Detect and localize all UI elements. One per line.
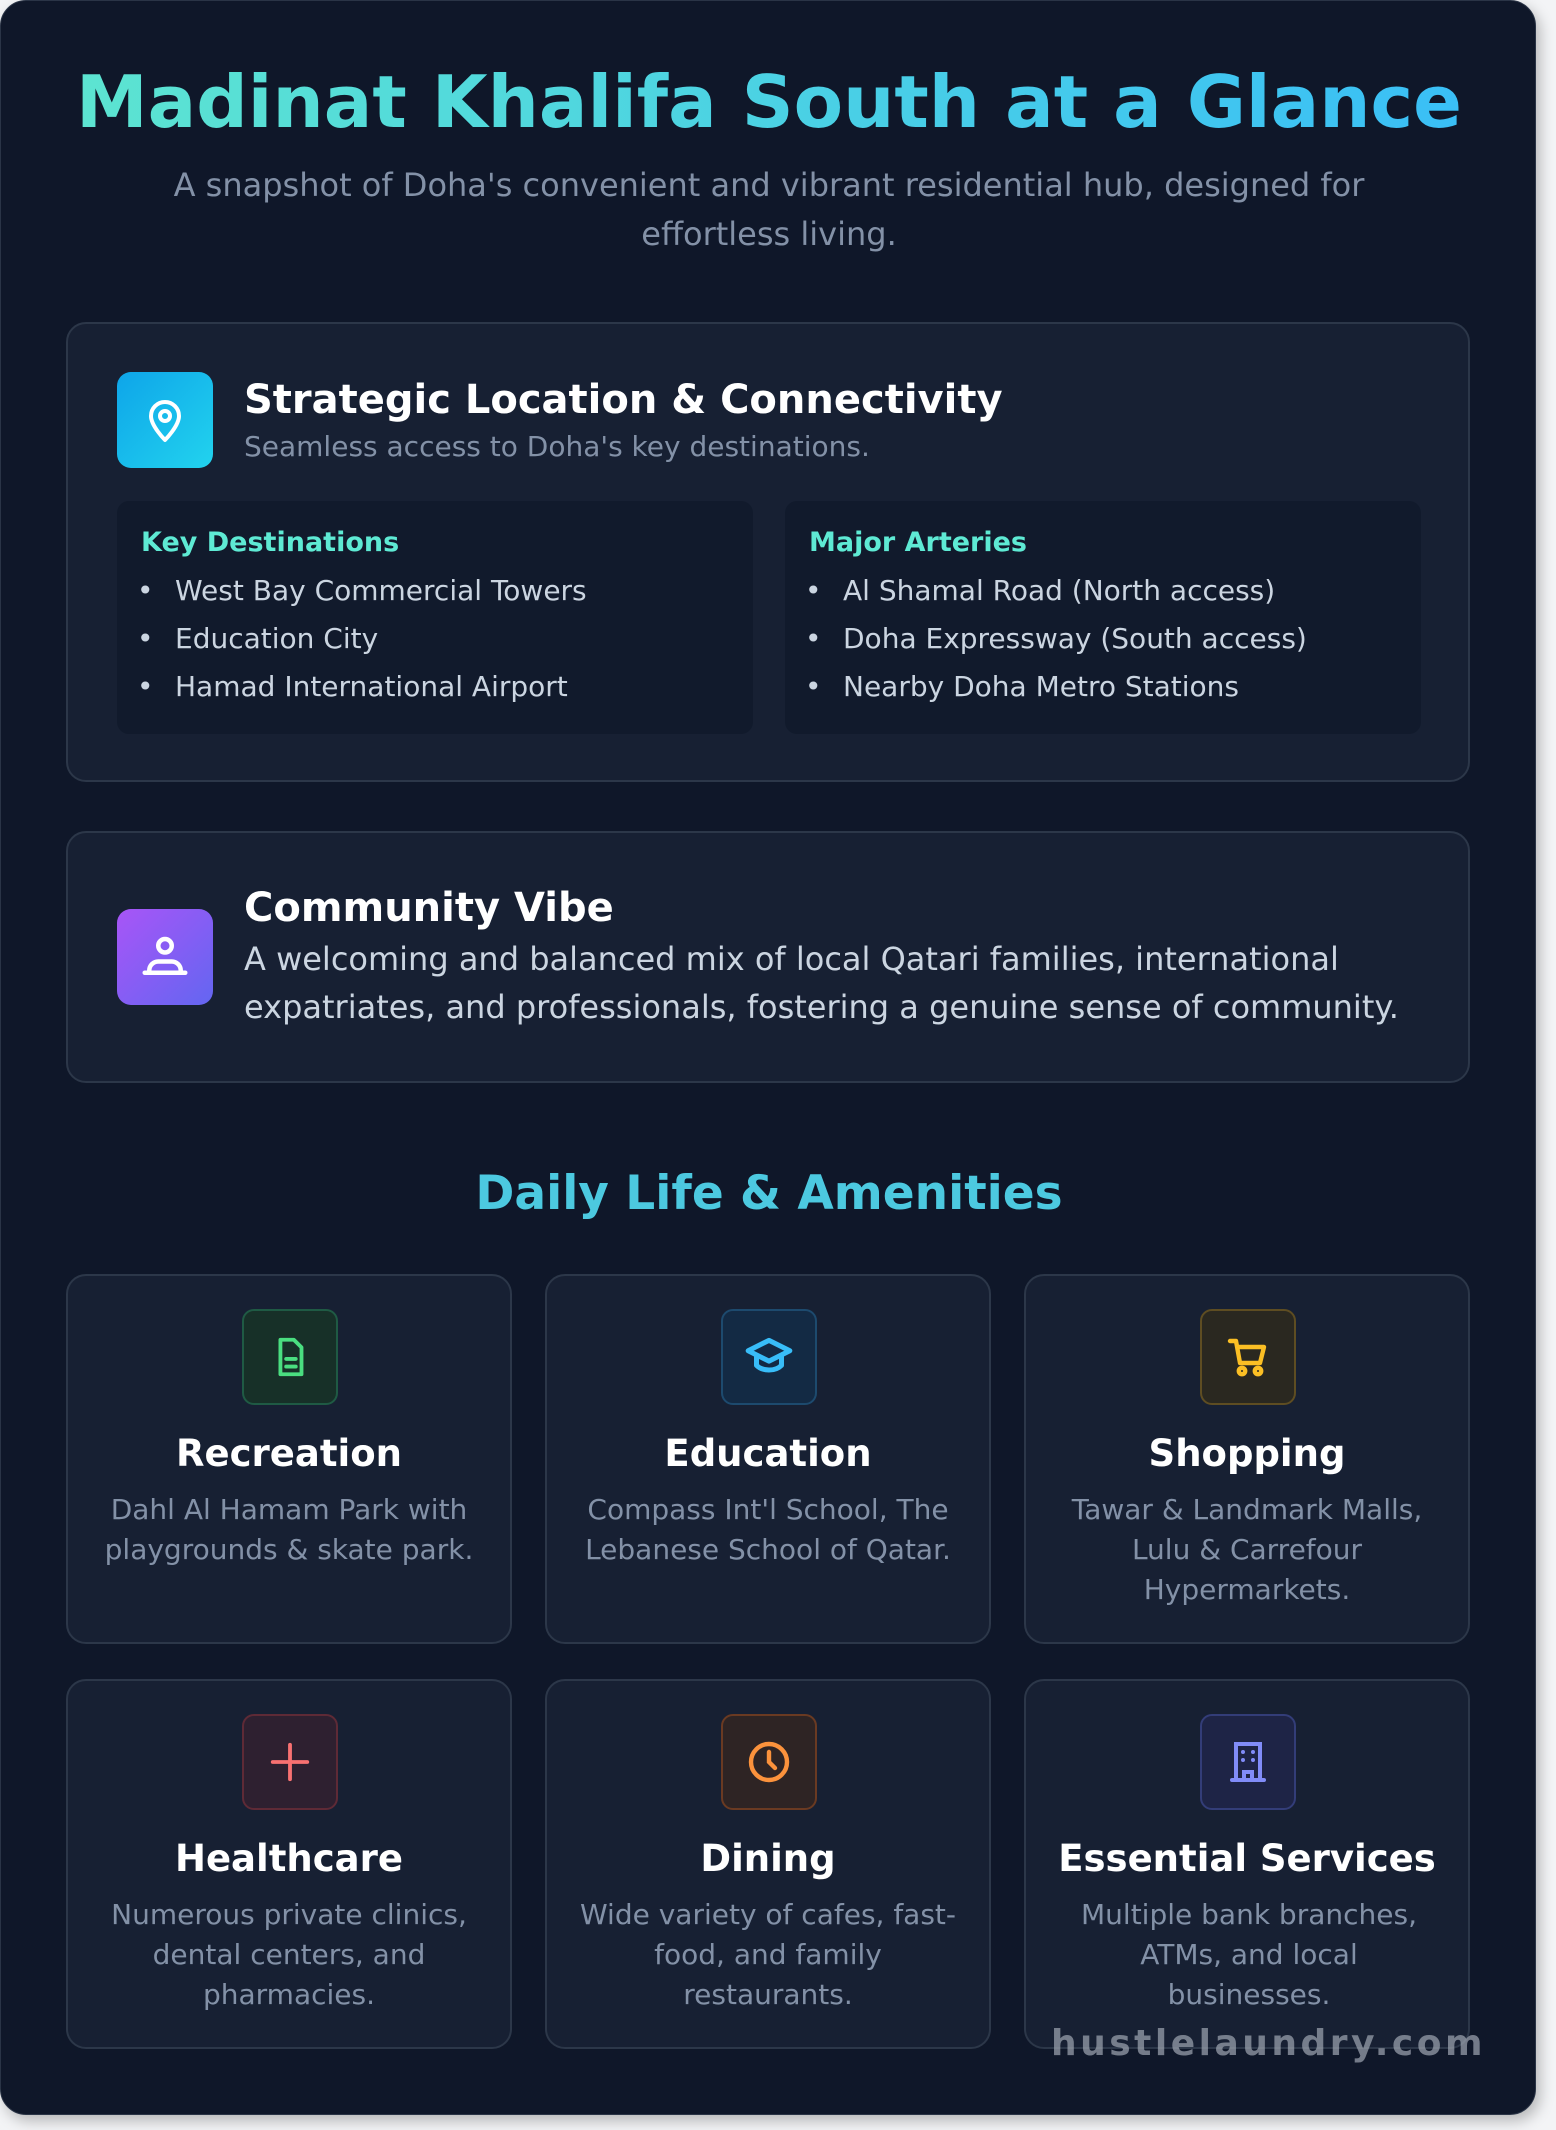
box: major arteries: Doha Expressway (South access) [843,622,1307,655]
card: education: Education [664,1432,872,1475]
icon: document [242,1309,338,1405]
icon: clock [721,1714,817,1810]
section heading: Daily Life & Amenities [475,1166,1063,1221]
card: essential services [1024,1679,1470,2049]
card: recreation [66,1274,512,1644]
box: major arteries: Al Shamal Road (North access) [843,574,1275,607]
icon: graduation cap [721,1309,817,1405]
card: shopping: Tawar & Landmark Malls, Lulu & Carrefour Hypermarkets. [1072,1493,1422,1606]
panel: community [66,831,1470,1083]
icon: location pin [117,372,213,468]
card: shopping: Shopping [1149,1432,1345,1475]
card: education [545,1274,991,1644]
icon: cart [1200,1309,1296,1405]
box: major arteries [785,501,1421,734]
card: healthcare: Healthcare [175,1837,403,1880]
card: dining: Dining [700,1837,836,1880]
box: key destinations [117,501,753,734]
card: shopping [1024,1274,1470,1644]
box: key destinations: Education City [175,622,378,655]
box: key destinations: West Bay Commercial Towers [175,574,587,607]
card: essential services: Essential Services [1058,1837,1436,1880]
title: Madinat Khalifa South at a Glance [76,60,1462,144]
subheading: Seamless access to Doha's key destinations. [244,430,870,463]
heading: Strategic Location & Connectivity [244,377,1003,423]
card: dining: Wide variety of cafes, fast-food, and family restaurants. [580,1898,956,2011]
box: major arteries: Nearby Doha Metro Stations [843,670,1239,703]
card: dining [545,1679,991,2049]
box: key destinations: Hamad International Airport [175,670,568,703]
heading: Community Vibe [244,885,614,931]
box: key destinations: Key Destinations [141,527,399,558]
card: recreation: Recreation [176,1432,402,1475]
card: recreation: Dahl Al Hamam Park with playgrounds & skate park. [105,1493,473,1566]
watermark: hustlelaundry.com [1051,2023,1486,2064]
icon: building [1200,1714,1296,1810]
card: healthcare [66,1679,512,2049]
icon: people [117,909,213,1005]
subtitle: A snapshot of Doha's convenient and vibrant residential hub, designed for effortless living. [174,166,1364,253]
card: education: Compass Int'l School, The Lebanese School of Qatar. [585,1493,951,1566]
card: essential services: Multiple bank branches, ATMs, and local businesses. [1081,1898,1417,2011]
text: A welcoming and balanced mix of local Qatari families, international expatriates, and professionals, fostering a genuine sense of community. [244,940,1399,1026]
panel: location [66,322,1470,782]
box: major arteries: Major Arteries [809,527,1027,558]
icon: plus [242,1714,338,1810]
card: healthcare: Numerous private clinics, dental centers, and pharmacies. [111,1898,467,2011]
